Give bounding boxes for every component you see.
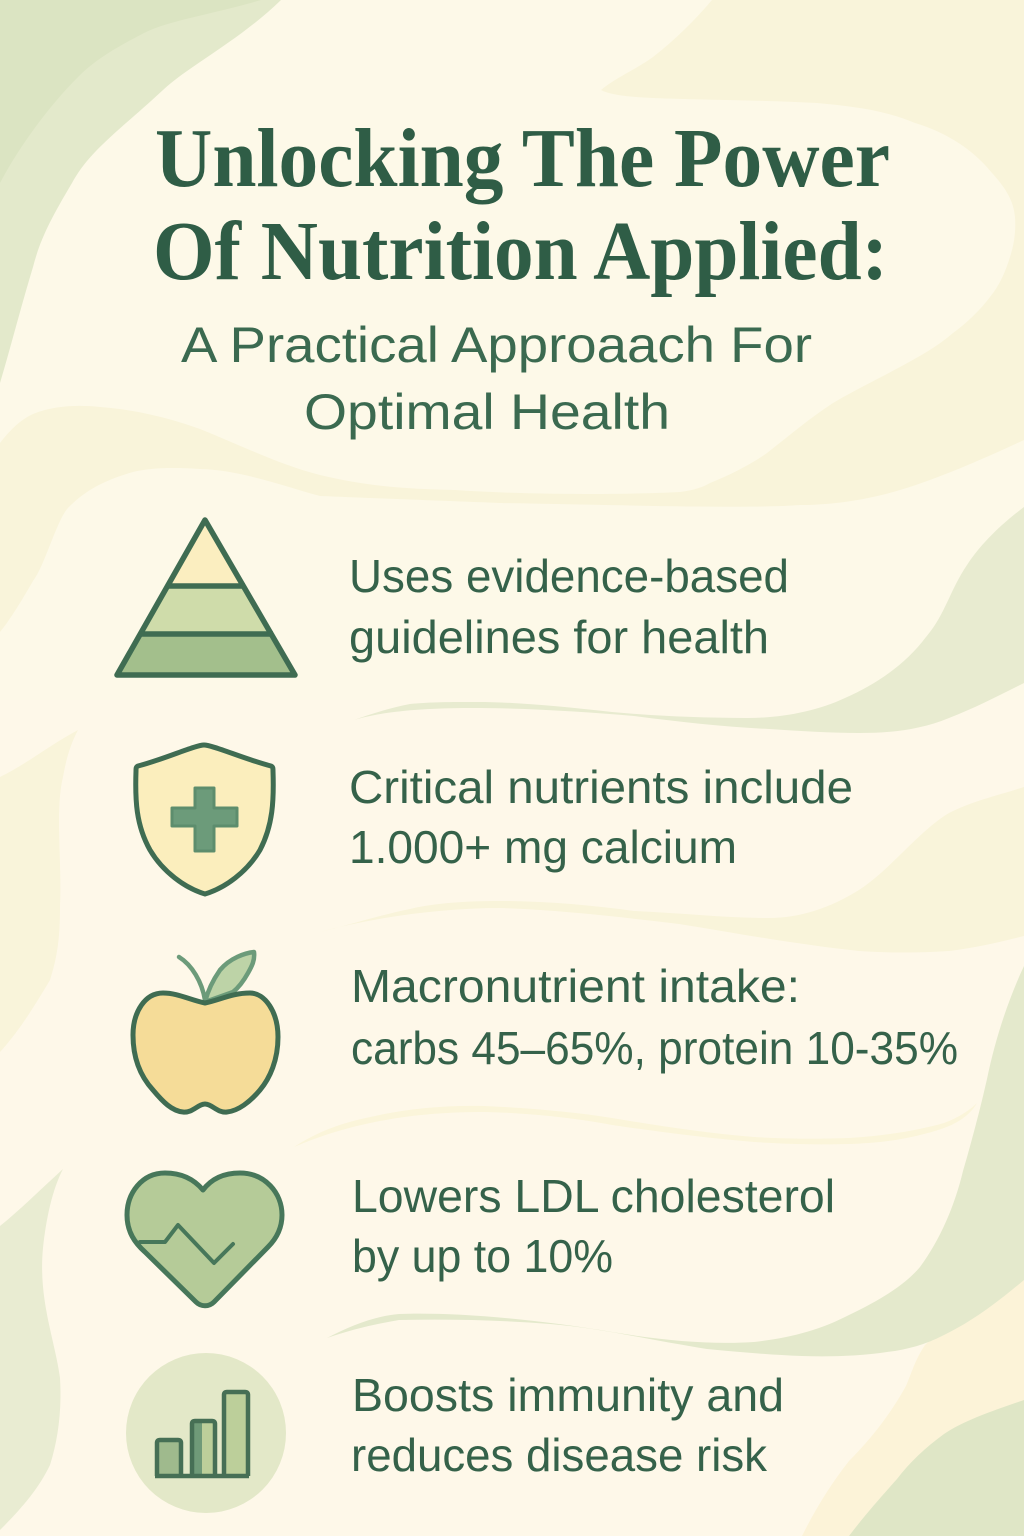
text: nutrients: Critical nutrients include (349, 761, 853, 813)
item 4: LDL cholesterol (127, 1170, 835, 1306)
text: cholesterol: Lowers LDL cholesterol (352, 1170, 835, 1222)
text: cholesterol (352, 1170, 835, 1282)
text: guidelines: guidelines for health (349, 611, 769, 663)
text: guidelines (349, 550, 789, 663)
title: Of Nutrition Applied: (153, 205, 888, 298)
icon: apple (133, 952, 278, 1112)
title (153, 112, 890, 298)
text: cholesterol: by up to 10% (352, 1230, 613, 1282)
icon: shield with cross (136, 745, 273, 894)
subtitle: Optimal Health (304, 384, 670, 440)
subtitle (181, 317, 812, 440)
item 1: evidence-based guidelines (117, 520, 789, 675)
title: Unlocking The Power (155, 112, 890, 205)
text: macronutrients: carbs 45–65%, protein 10-35% (351, 1022, 958, 1074)
icon: food pyramid (117, 520, 295, 675)
item 5: immunity (126, 1353, 784, 1513)
text: guidelines: Uses evidence-based (349, 550, 789, 602)
text: macronutrients (351, 960, 958, 1074)
subtitle: A Practical Approaach For (181, 317, 812, 373)
icon: heart with pulse (127, 1173, 282, 1306)
text: nutrients: 1.000+ mg calcium (349, 821, 737, 873)
text: nutrients (349, 761, 853, 873)
text: immunity (351, 1369, 784, 1481)
text: immunity: Boosts immunity and (352, 1369, 784, 1421)
item 3: macronutrient intake (133, 952, 958, 1112)
text: immunity: reduces disease risk (351, 1429, 768, 1481)
text: macronutrients: Macronutrient intake: (351, 960, 800, 1012)
item 2: critical nutrients (136, 745, 853, 894)
icon: bar chart in circle (126, 1353, 286, 1513)
